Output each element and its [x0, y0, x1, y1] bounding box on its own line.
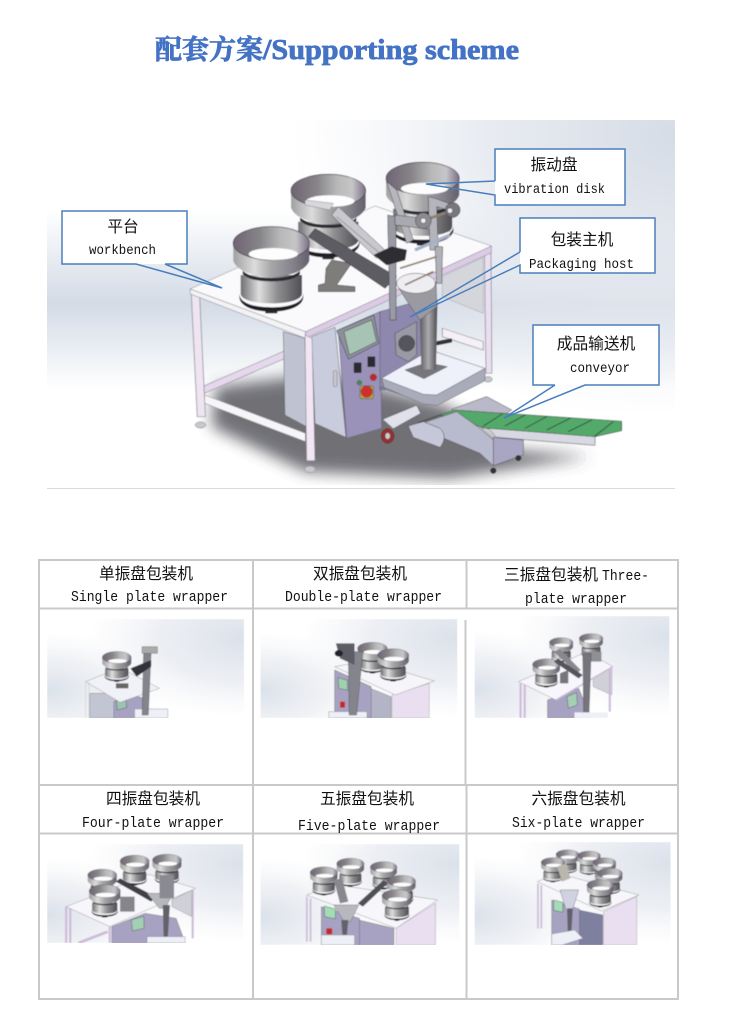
- header: 五振盘包装机: [320, 789, 414, 808]
- conveyor: [408, 397, 622, 473]
- leveling foot: [305, 466, 315, 473]
- touch screen: [337, 315, 379, 359]
- floor shadow: [212, 373, 591, 478]
- callout: workbench: [62, 211, 222, 288]
- callout: conveyor: 成品输送机: [557, 335, 636, 353]
- image background: [47, 120, 675, 489]
- cell: double plate: [260, 564, 457, 718]
- rear vibration bowls: [291, 174, 366, 259]
- leveling feet: [195, 377, 492, 428]
- header: Double-plate wrapper: [285, 589, 442, 606]
- front leg: [305, 335, 315, 461]
- rear panel: [442, 257, 483, 313]
- header: [82, 789, 224, 832]
- frame legs and rails: [191, 253, 492, 442]
- header: [285, 564, 442, 606]
- callout: workbench: workbench: [89, 243, 156, 259]
- header: [512, 789, 645, 832]
- thumbnail: five plate machine: [260, 844, 460, 945]
- thumbnail: three plate machine: [474, 616, 670, 718]
- cell: five plate: [260, 789, 460, 945]
- thumbnail: double plate machine: [260, 619, 457, 718]
- callout: conveyor: [504, 325, 659, 418]
- cell: four plate: [47, 789, 243, 943]
- header: 单振盘包装机: [99, 564, 193, 583]
- header: [504, 565, 649, 608]
- forming column: [419, 300, 437, 369]
- header: 四振盘包装机: [106, 789, 200, 808]
- hopper funnel: [397, 272, 437, 320]
- cell: six plate: [474, 789, 671, 945]
- header: plate wrapper: [525, 591, 627, 608]
- frame and table: [190, 206, 591, 478]
- header: Five-plate wrapper: [298, 818, 440, 835]
- panel: main machine diagram: [47, 120, 675, 489]
- header: Single plate wrapper: [71, 589, 228, 606]
- header: 三振盘包装机: [504, 565, 598, 584]
- header: 双振盘包装机: [313, 564, 407, 583]
- header: Four-plate wrapper: [82, 815, 224, 832]
- table grid: [39, 560, 678, 999]
- chute mount bracket: [318, 260, 355, 292]
- callout: packaging host: Packaging host: [529, 257, 634, 273]
- thumbnail: single plate machine: [47, 619, 244, 718]
- table top: [190, 206, 491, 338]
- callout: workbench: 平台: [107, 218, 139, 236]
- control buttons: [354, 357, 377, 399]
- callout: packaging host: 包装主机: [551, 231, 614, 249]
- callout: vibration disk: vibration disk: [504, 182, 605, 198]
- header: Six-plate wrapper: [512, 815, 645, 832]
- door handle: [333, 371, 337, 387]
- base plate: [382, 350, 485, 405]
- header: 六振盘包装机: [531, 789, 626, 808]
- feed tray: [305, 200, 333, 210]
- title: [155, 34, 519, 66]
- header: [71, 564, 228, 606]
- header: Three-: [602, 568, 649, 585]
- cart and caster: [381, 405, 421, 443]
- callout: vibration disk: 振动盘: [530, 155, 578, 174]
- front vibration bowl: [233, 227, 309, 313]
- cabinet, base and conveyor: [283, 300, 622, 473]
- cell: three plate: [474, 565, 670, 718]
- title: 配套方案: [155, 34, 263, 65]
- callout: vibration disk: [426, 149, 625, 205]
- cell: single plate: [47, 564, 244, 718]
- feed chutes: [332, 182, 413, 258]
- table: machine variants: [39, 560, 678, 999]
- thumbnail: six plate machine: [474, 842, 671, 945]
- callout: conveyor: conveyor: [570, 361, 630, 377]
- title: /Supporting scheme: [262, 34, 519, 66]
- dark chute: [308, 228, 397, 288]
- callout: packaging host: [410, 218, 655, 317]
- thumbnail: four plate machine: [47, 844, 243, 943]
- illustration: packaging machine: [190, 162, 622, 478]
- drive mechanism: [395, 322, 452, 362]
- bowls and feeding mechanism: [233, 162, 460, 320]
- packaging mechanism: [374, 197, 460, 320]
- cabinet: [283, 300, 483, 438]
- header: [298, 789, 440, 835]
